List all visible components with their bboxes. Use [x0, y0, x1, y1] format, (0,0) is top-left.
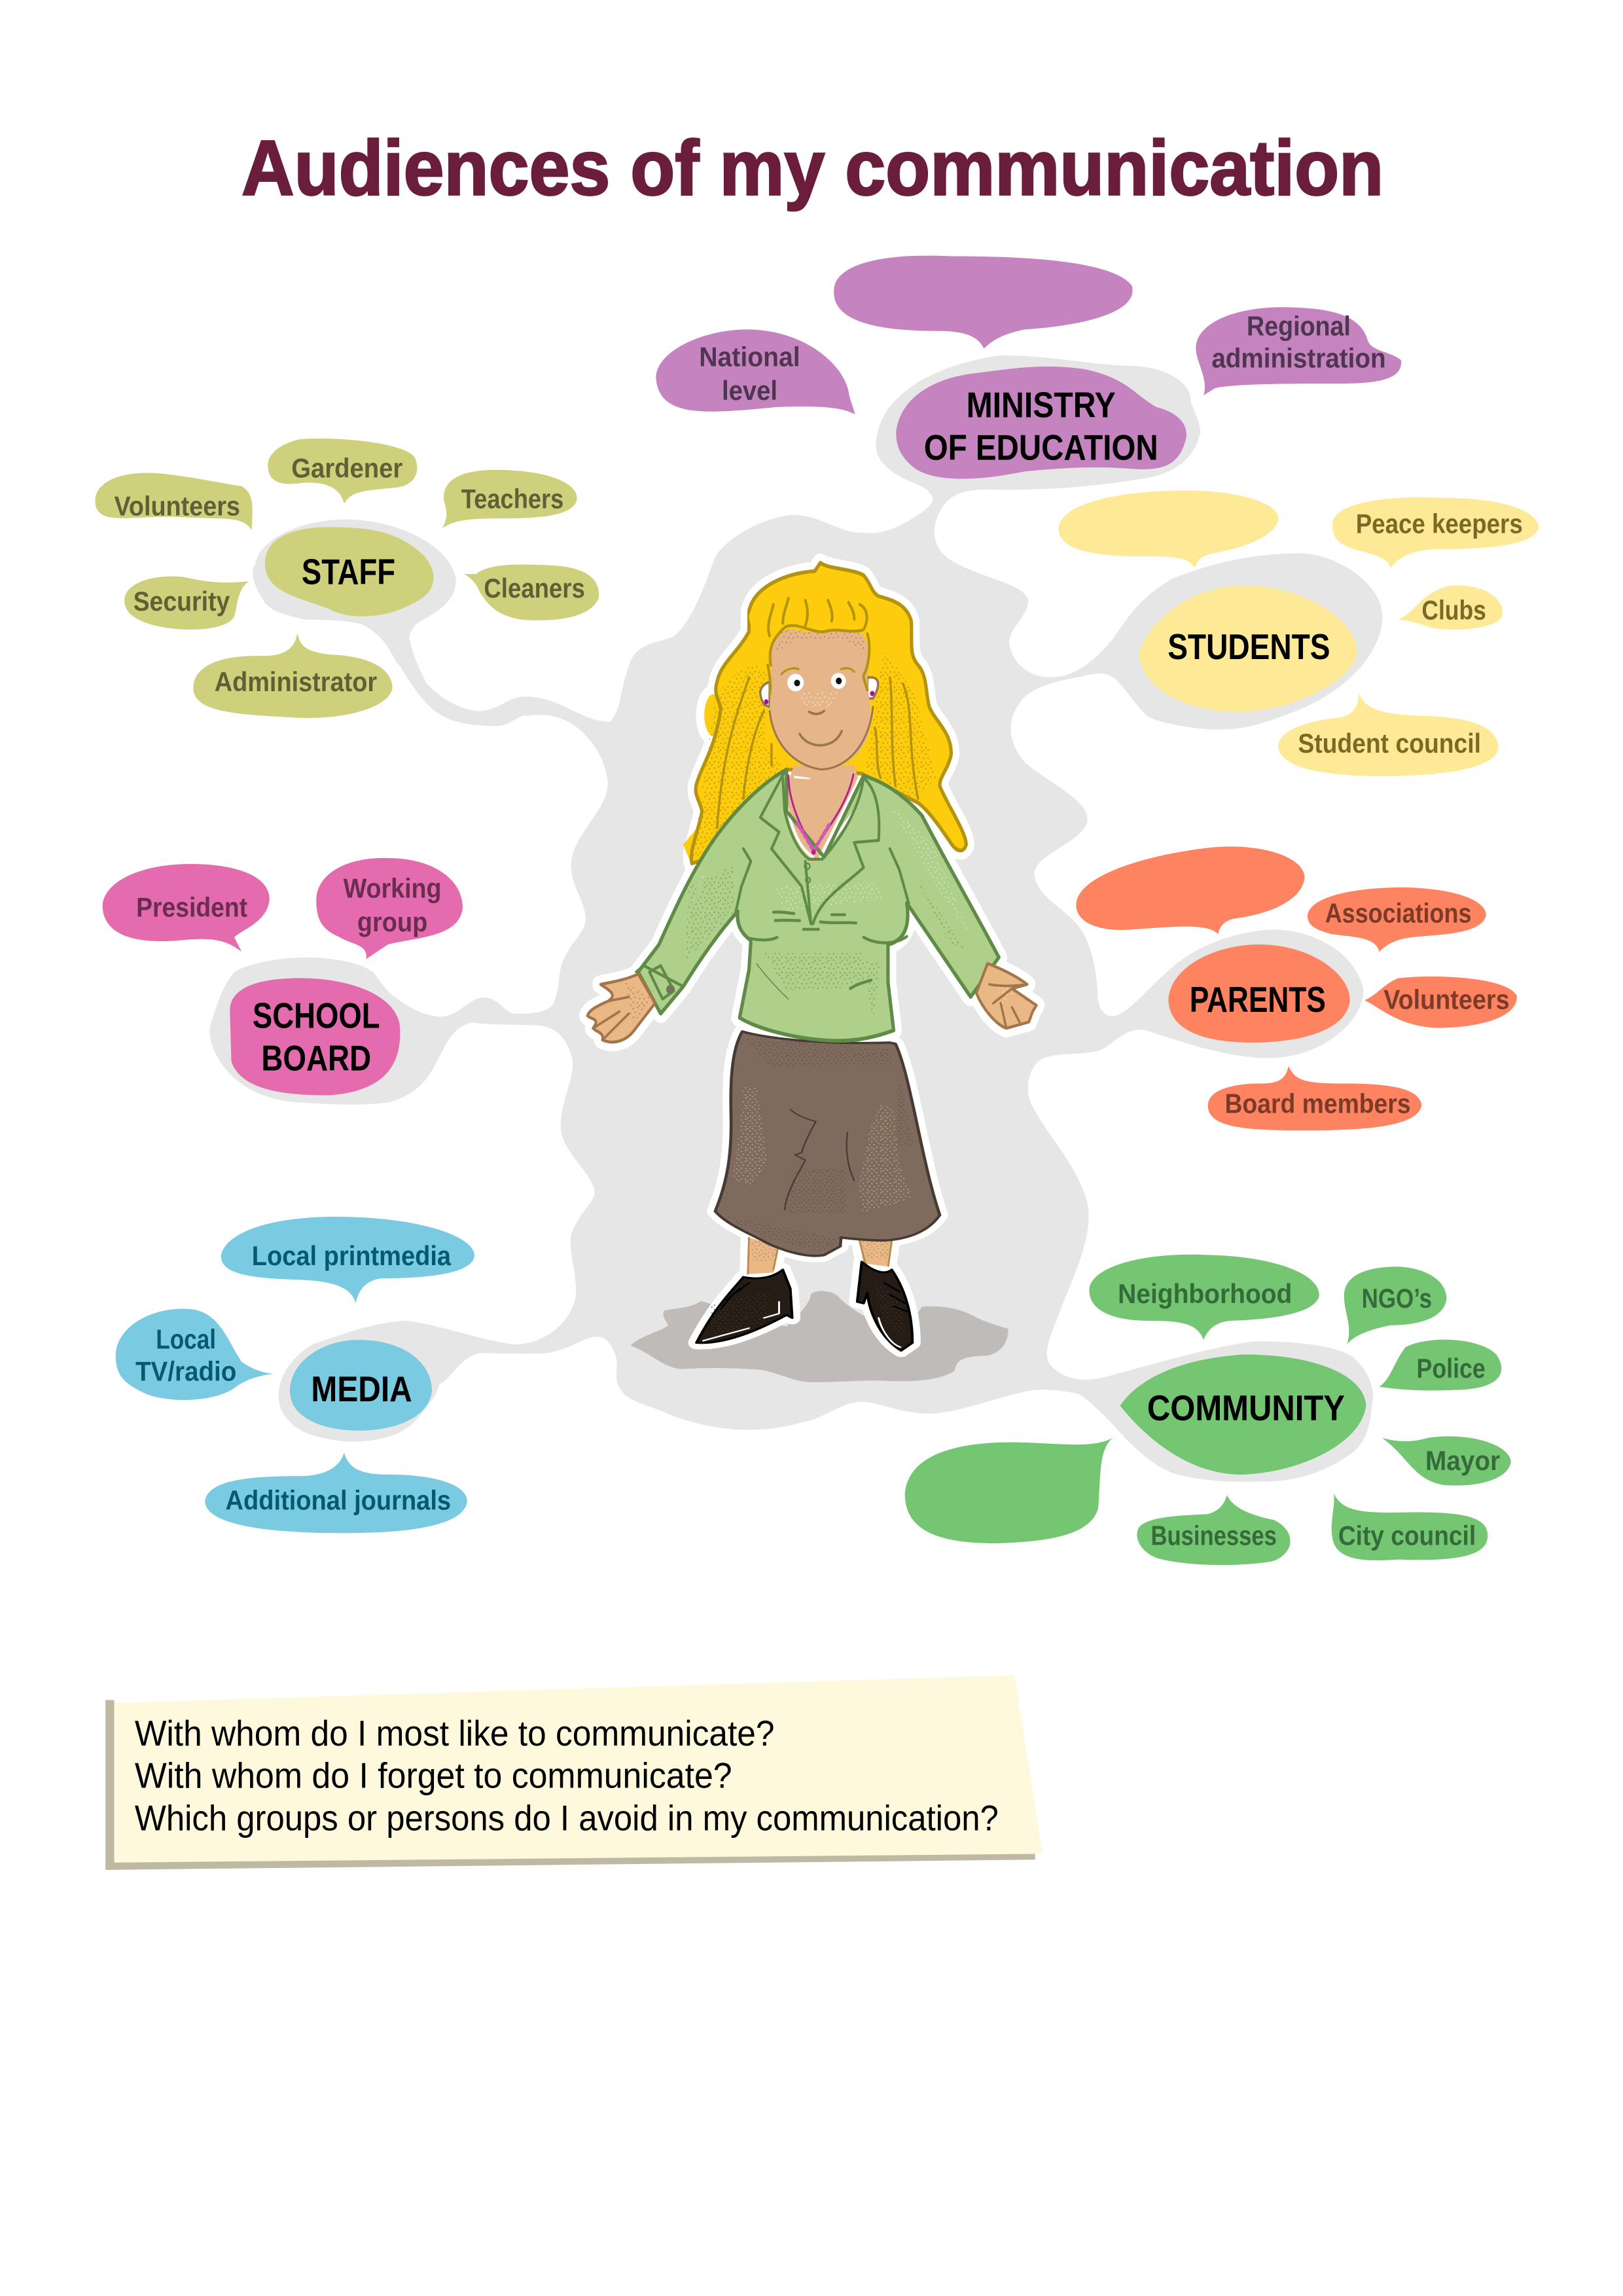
bubble: board members	[1208, 1066, 1421, 1130]
hub: community group	[905, 1255, 1511, 1565]
bubble: empty students note	[1058, 490, 1278, 568]
bubble: teachers: Teachers	[461, 484, 563, 514]
bubble: clubs: Clubs	[1421, 595, 1486, 625]
bubble: mayor	[1382, 1436, 1511, 1486]
bubble: administrator	[193, 632, 393, 718]
hub: students: STUDENTS	[1168, 626, 1330, 667]
bubble: neighborhood	[1089, 1255, 1319, 1340]
hub: staff	[265, 527, 433, 617]
white halo around lower body	[696, 1031, 940, 1351]
bubble: regional administration: Regional	[1247, 311, 1351, 341]
bubble: additional journals: Additional journals	[226, 1486, 451, 1516]
bubble: additional journals	[205, 1452, 467, 1533]
bubble: businesses	[1137, 1495, 1291, 1565]
bubble: volunteers	[1364, 977, 1517, 1028]
bubble: police: Police	[1417, 1354, 1486, 1384]
hub: school board	[230, 978, 400, 1095]
bubble: empty ministry note	[834, 256, 1133, 348]
hub: parents group	[1076, 846, 1517, 1130]
bubble: clubs	[1399, 585, 1503, 630]
hub: staff group	[95, 439, 599, 718]
bubble: regional administration	[1196, 307, 1401, 395]
blouse	[638, 770, 999, 1041]
lower body: skirt, legs, shoes	[696, 1031, 940, 1351]
bubble: police	[1379, 1340, 1501, 1390]
bubble: volunteers	[95, 473, 253, 530]
bubble: ngos: NGO’s	[1362, 1283, 1432, 1314]
hub: parents	[1168, 944, 1350, 1043]
bubble: president: President	[136, 893, 247, 923]
hub: community	[1120, 1354, 1366, 1475]
white halo around upper body	[588, 563, 1037, 1042]
bubble: regional administration: administration	[1211, 344, 1386, 374]
hub: media: MEDIA	[311, 1369, 412, 1409]
question lines: With whom do I most like to communicate?	[135, 1713, 775, 1753]
teacher figure	[588, 563, 1037, 1351]
necklace	[789, 774, 853, 851]
hub: ministry	[896, 367, 1186, 479]
bubble: student council: Student council	[1298, 728, 1481, 759]
bubble: administrator: Administrator	[215, 667, 377, 697]
hair	[704, 694, 722, 736]
hub: community: COMMUNITY	[1147, 1388, 1345, 1428]
bubble: gardener: Gardener	[291, 453, 402, 483]
bubble: security: Security	[134, 586, 230, 617]
grey connection network behind the teacher	[209, 355, 1382, 1482]
bubble: local printmedia	[221, 1217, 474, 1303]
bubble: volunteers: Volunteers	[115, 492, 240, 522]
note paper	[115, 1675, 1043, 1863]
bubble: national level	[656, 329, 855, 414]
floor shadow under the teacher	[631, 1291, 1008, 1382]
hub: school board group	[103, 858, 463, 1095]
bubble: empty parents note	[1076, 846, 1304, 934]
bubble: cleaners: Cleaners	[484, 573, 585, 603]
bubble: peace keepers: Peace keepers	[1356, 509, 1523, 539]
hub: ministry: OF EDUCATION	[924, 427, 1158, 467]
ears	[760, 677, 878, 707]
bubble: working group: group	[357, 907, 427, 937]
bubble: board members: Board members	[1224, 1088, 1411, 1119]
question lines	[135, 1713, 999, 1839]
bubble: cleaners	[464, 565, 599, 620]
bubble: local tv radio	[116, 1309, 274, 1400]
neck	[787, 765, 858, 857]
hub: ministry: MINISTRY	[967, 385, 1116, 425]
hands	[588, 974, 655, 1042]
hub: parents: PARENTS	[1190, 979, 1326, 1020]
bubble: businesses: Businesses	[1150, 1520, 1277, 1551]
title: Audiences of my communication	[241, 126, 1383, 212]
reflection questions note	[105, 1675, 1043, 1870]
hub: school board: SCHOOL	[253, 996, 380, 1036]
hub: students	[1139, 586, 1357, 711]
fringe	[749, 581, 867, 640]
hub: media group	[116, 1217, 474, 1533]
hub: staff: STAFF	[302, 552, 395, 592]
bubble: ngos	[1344, 1266, 1446, 1344]
bubble: national level: National	[699, 342, 800, 372]
bubble: peace keepers	[1332, 497, 1539, 568]
bubble: local tv radio: TV/radio	[135, 1357, 236, 1387]
hub: media	[290, 1340, 432, 1431]
eyes and mouth	[787, 674, 804, 691]
question lines: With whom do I forget to communicate?	[135, 1755, 732, 1796]
bubble: security	[124, 577, 249, 630]
legs	[748, 1238, 892, 1274]
bubble: mayor: Mayor	[1425, 1446, 1500, 1476]
bubble: president	[103, 864, 270, 952]
bubble: gardener	[268, 439, 417, 504]
bubble: volunteers: Volunteers	[1383, 984, 1510, 1014]
bubble: city council	[1332, 1494, 1488, 1560]
hub: students group	[1058, 490, 1539, 776]
bubble: neighborhood: Neighborhood	[1118, 1279, 1292, 1309]
upper body: hair, head, blouse, hands	[588, 563, 1037, 1042]
bubble: national level: level	[722, 376, 777, 406]
shoes	[696, 1270, 793, 1343]
bubble: working group	[316, 858, 463, 959]
hub: school board: BOARD	[261, 1037, 371, 1078]
bubble: local printmedia: Local printmedia	[252, 1241, 452, 1271]
question lines: Which groups or persons do I avoid in my communication?	[135, 1798, 999, 1839]
bubble: associations: Associations	[1325, 898, 1471, 928]
bubble: associations	[1308, 888, 1486, 952]
note shadow	[105, 1700, 1035, 1870]
bubble: city council: City council	[1338, 1520, 1476, 1551]
bubble: empty community note	[905, 1438, 1113, 1543]
bubble: local tv radio: Local	[156, 1325, 216, 1355]
face	[770, 630, 871, 770]
bubble: student council	[1278, 692, 1498, 776]
bubble: teachers	[442, 470, 577, 529]
bubble: working group: Working	[344, 873, 442, 903]
hub: ministry of education group	[656, 256, 1401, 479]
skirt	[715, 1031, 940, 1256]
